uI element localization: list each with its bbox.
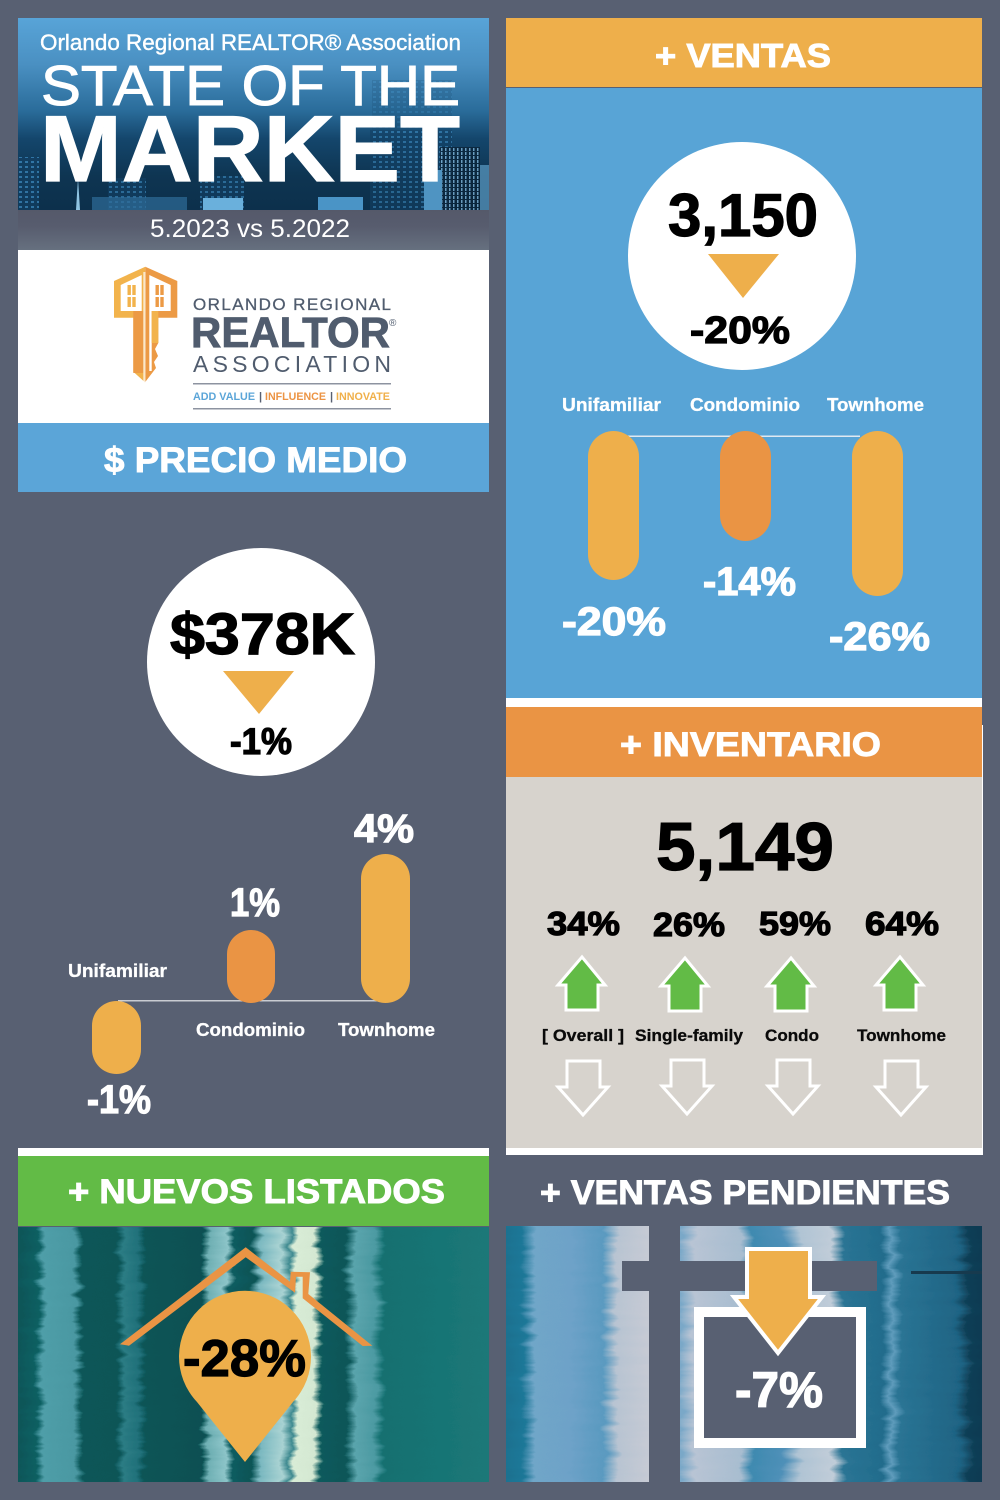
- logo text: association: ASSOCIATION: [193, 351, 391, 377]
- label: townhome: Townhome: [857, 1026, 946, 1045]
- logo text: orlando regional: ORLANDO REGIONAL: [193, 295, 391, 314]
- bar: condominio: [227, 930, 275, 1003]
- panel: inventario: [506, 777, 982, 1148]
- icon: up arrow single-family: [661, 958, 708, 1011]
- panel: nuevos listados heading: + NUEVOS LISTADOS: [68, 1173, 445, 1211]
- panel: logo: [18, 250, 489, 423]
- logo tagline: INFLUENCE: [265, 391, 326, 403]
- logo tagline: ADD VALUE: [193, 391, 255, 403]
- label: unifamiliar: Unifamiliar: [562, 395, 661, 415]
- panel: nuevos listados heading: [18, 1156, 489, 1226]
- title: state of the: STATE OF THE: [41, 54, 460, 118]
- logo tagline: [193, 391, 390, 403]
- date range: 5.2023 vs 5.2022: [150, 215, 350, 243]
- panel: precio medio circle: [147, 548, 375, 776]
- reflection strip: [18, 210, 489, 250]
- change: sales: -20%: [690, 310, 790, 352]
- logo text: registered mark: ®: [389, 318, 397, 329]
- panel: precio medio heading: $ PRECIO MEDIO: [104, 441, 407, 480]
- panel: ventas heading: [506, 18, 982, 87]
- association line: Orlando Regional REALTOR® Association: [40, 30, 461, 55]
- icon: down arrow overall: [558, 1061, 608, 1115]
- panel: inventario heading: [506, 707, 982, 777]
- icon: house key: [114, 267, 177, 382]
- panel: precio medio heading: [18, 423, 489, 492]
- logo tagline: |: [330, 391, 333, 403]
- icon: down arrow townhome: [876, 1061, 926, 1115]
- value: overall: 34%: [547, 905, 620, 942]
- label: single-family: Single-family: [635, 1026, 744, 1045]
- value: inventory: 5,149: [656, 809, 834, 885]
- city skyline: [18, 80, 489, 210]
- label: townhome: Townhome: [827, 395, 924, 415]
- icon: up arrow townhome: [876, 957, 923, 1010]
- value: pending sales: -7%: [735, 1362, 823, 1418]
- heading: ventas pendientes: + VENTAS PENDIENTES: [540, 1174, 950, 1212]
- panel: nuevos listados: [18, 1227, 489, 1482]
- value: unifamiliar: -20%: [562, 600, 666, 644]
- panel: inventario heading: + INVENTARIO: [620, 726, 881, 764]
- change: median price: -1%: [230, 721, 292, 762]
- value: sales: 3,150: [668, 182, 818, 249]
- panel: ventas: [506, 88, 982, 698]
- panel: header banner: [18, 18, 489, 250]
- photo: teal water texture: [18, 1227, 489, 1482]
- logo rule bottom: [193, 408, 391, 410]
- chart: precio medio by property type: [68, 807, 435, 1122]
- bar: townhome: [361, 854, 410, 1003]
- value: new listings: -28%: [183, 1330, 306, 1388]
- icon: down triangle: [223, 671, 294, 714]
- logo tagline: |: [259, 391, 262, 403]
- value: townhome: 64%: [865, 905, 939, 942]
- label: townhome: Townhome: [338, 1020, 435, 1040]
- icon: house roof: [120, 1247, 372, 1346]
- label: condominio: Condominio: [690, 395, 800, 415]
- label: overall: [ Overall ]: [542, 1026, 624, 1045]
- value: single-family: 26%: [653, 906, 725, 943]
- bar: condominio: [720, 431, 771, 541]
- value: median price: $378K: [170, 602, 355, 667]
- label: condo: Condo: [765, 1026, 819, 1045]
- value: condominio: -14%: [703, 560, 796, 604]
- logo rule top: [193, 383, 391, 384]
- box: [699, 1312, 861, 1443]
- label: condominio: Condominio: [196, 1020, 305, 1040]
- panel: ventas heading: + VENTAS: [655, 37, 831, 74]
- ventas circle: [628, 142, 856, 370]
- icon: down arrow condo: [768, 1060, 818, 1114]
- panel: ventas pendientes: [506, 1226, 982, 1482]
- icon: down triangle: [708, 254, 779, 298]
- icon: up arrow overall: [558, 957, 605, 1010]
- label: unifamiliar: Unifamiliar: [68, 961, 167, 981]
- logo tagline: INNOVATE: [336, 391, 390, 403]
- value: condominio: 1%: [230, 881, 280, 925]
- photo left: [506, 1226, 649, 1482]
- photo right: [680, 1226, 982, 1482]
- value: condo: 59%: [759, 905, 831, 942]
- icon: down arrow: [734, 1249, 822, 1353]
- bar: unifamiliar: [588, 431, 639, 580]
- bar: townhome: [852, 431, 903, 596]
- value: townhome: -26%: [829, 615, 930, 659]
- icon: map pin: [179, 1291, 311, 1462]
- icon: down arrow single-family: [662, 1060, 712, 1114]
- value: unifamiliar: -1%: [87, 1078, 151, 1122]
- logo text: realtor: REALTOR: [191, 309, 390, 357]
- value: townhome: 4%: [354, 807, 414, 851]
- icon: up arrow condo: [767, 958, 814, 1011]
- title: market: MARKET: [40, 96, 460, 201]
- bar: unifamiliar: [92, 1001, 141, 1074]
